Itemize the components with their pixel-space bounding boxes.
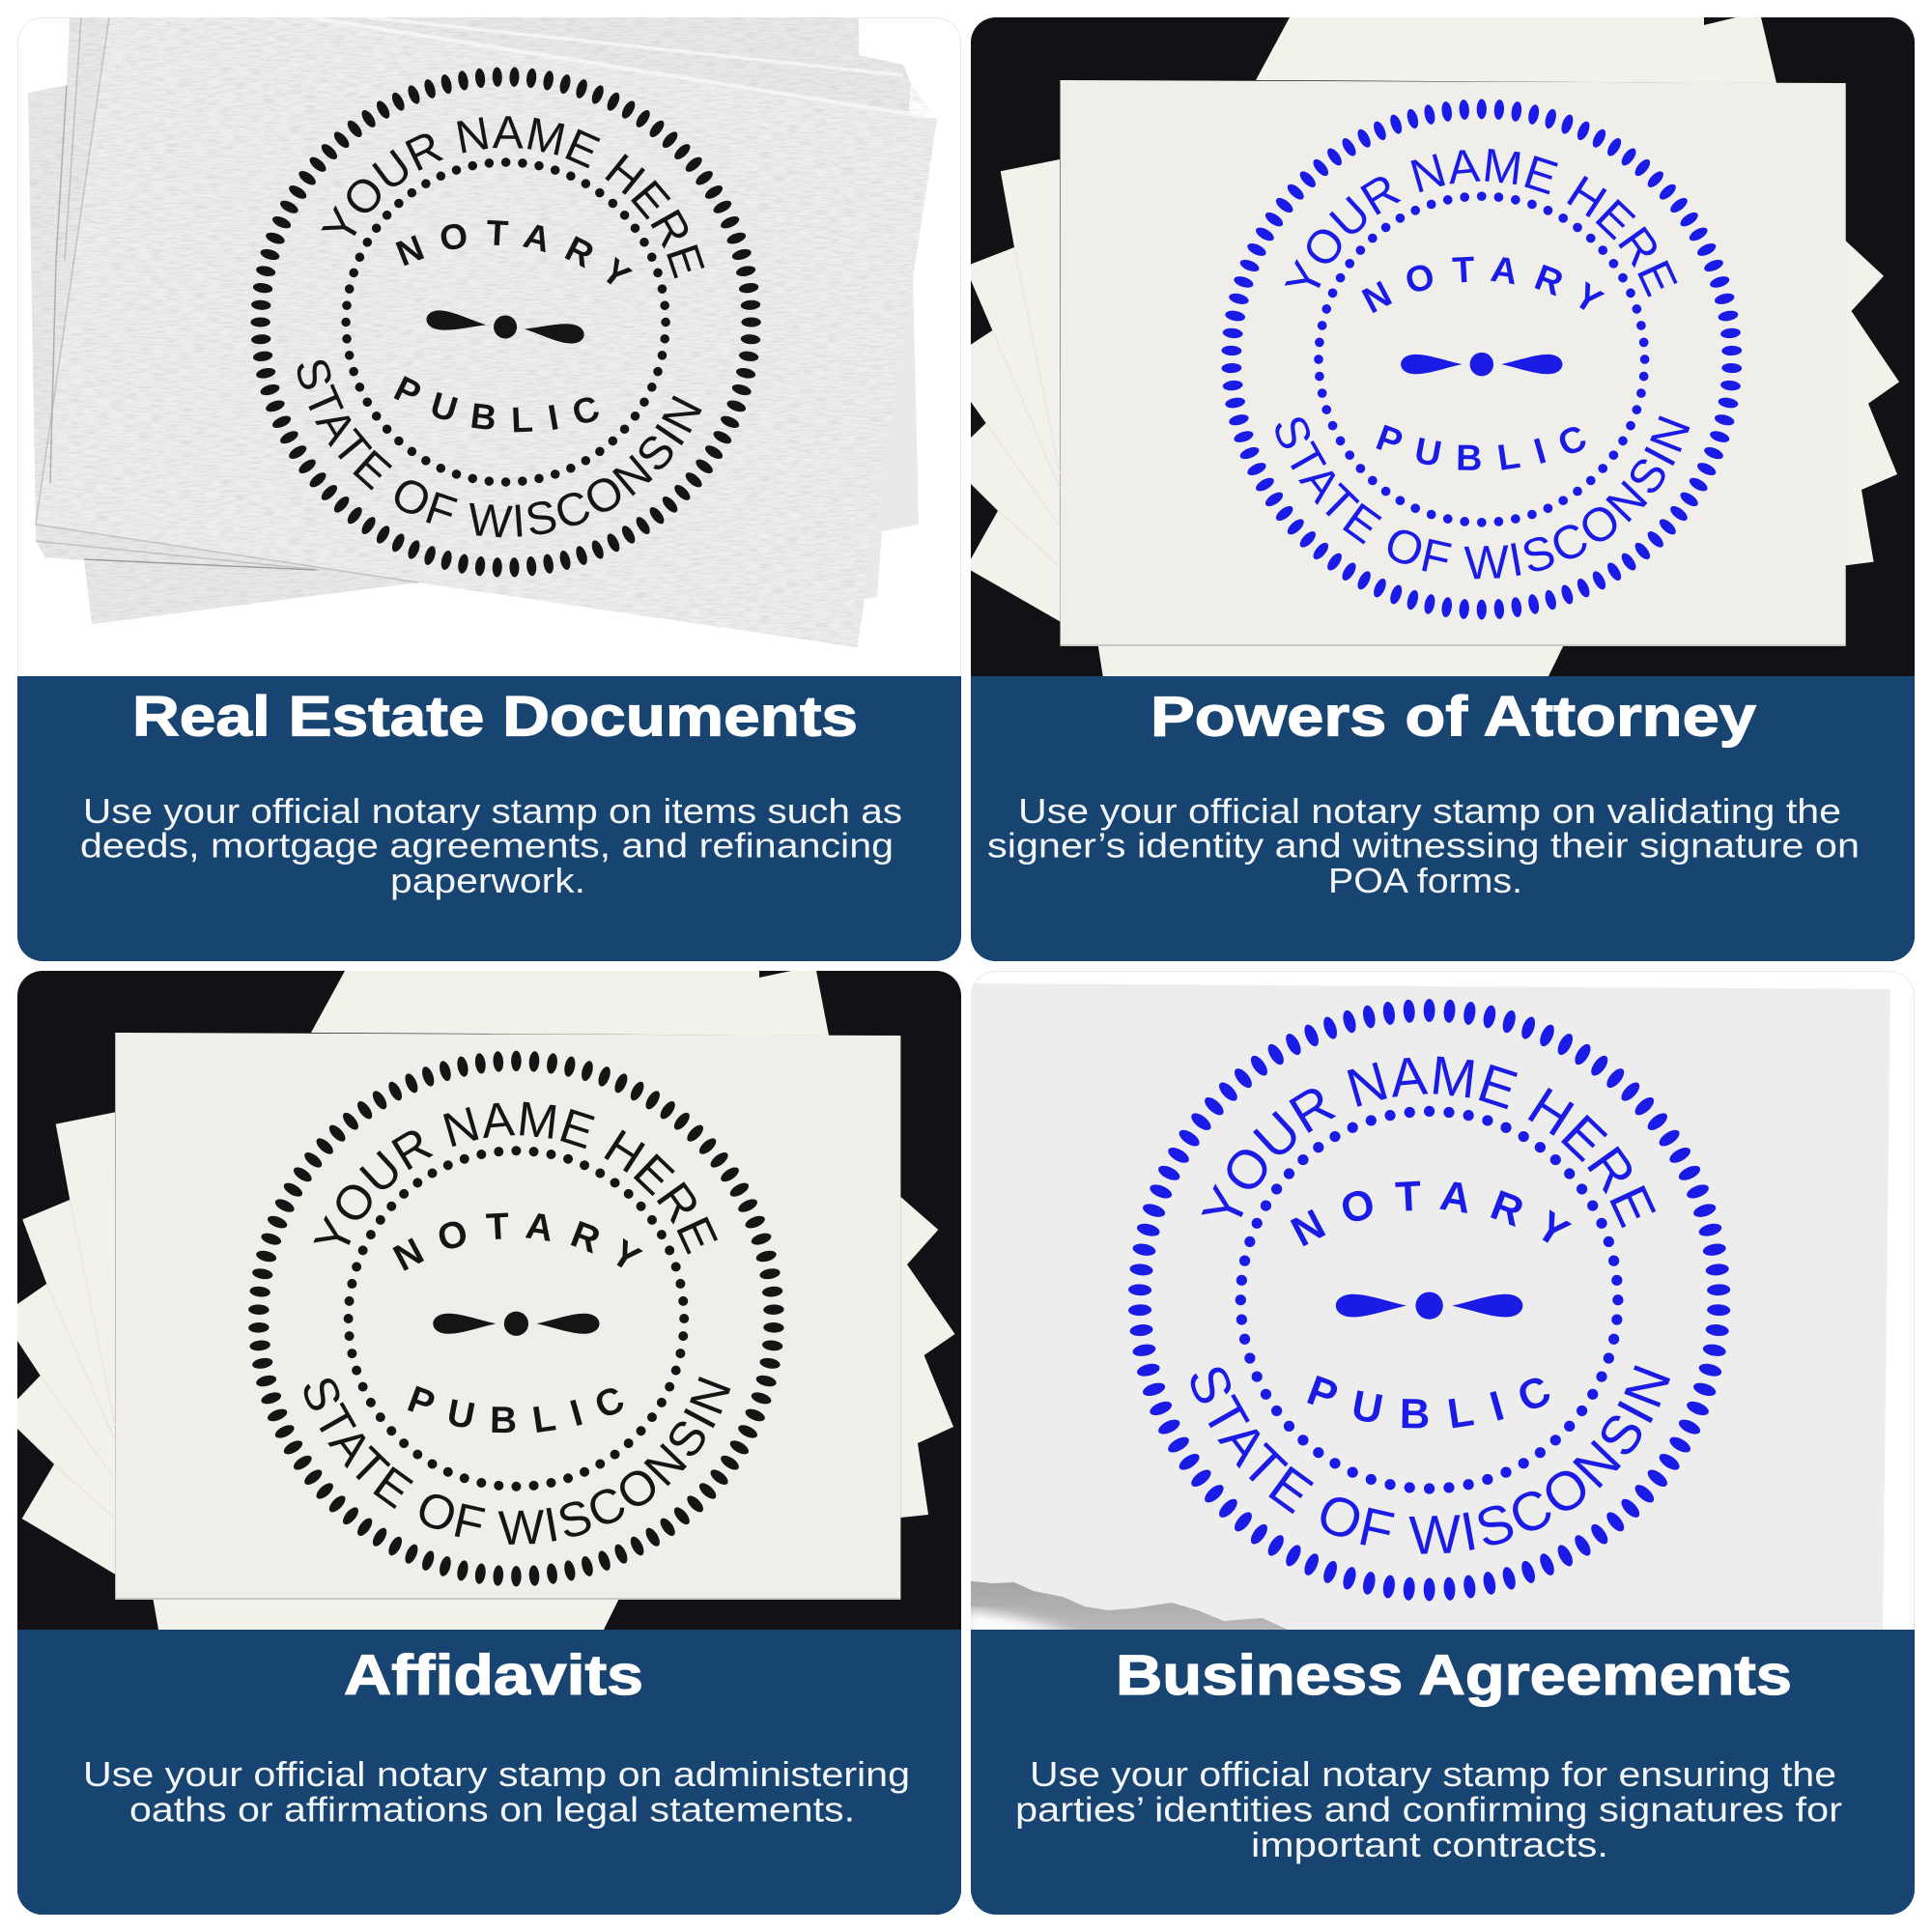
description: important contracts. [1251,1825,1608,1864]
stamp: blue seal: NOTARY [1362,257,1605,313]
description [80,791,902,900]
caption box [17,676,961,961]
photo: torn paper sheet [966,983,1890,1637]
stamp: blue seal: STATE OF WISCONSIN [1275,415,1690,580]
stamp: blue seal [1221,99,1743,620]
photo: fanned cream sheets and card [971,17,1899,676]
stamp: blue seal: STATE OF WISCONSIN [1190,1365,1670,1554]
description: Use your official notary stamp on administering [83,1754,910,1794]
panel: real estate documents [17,17,961,961]
heading: Business Agreements [1116,1644,1792,1707]
stamp: blue seal [1128,999,1731,1602]
panel: affidavits [17,971,961,1915]
description: signer’s identity and witnessing their signature on [987,825,1860,866]
stamp: blue seal: YOUR NAME HERE [1285,149,1678,298]
description [988,798,1857,893]
description: parties’ identities and confirming signatures for [1015,1789,1842,1830]
stamp: black seal: NOTARY [396,220,633,284]
stamp: black seal: STATE OF WISCONSIN [303,1377,730,1545]
description: paperwork. [390,861,585,900]
stamp: blue seal: PUBLIC [1376,425,1586,470]
description: oaths or affirmations on legal statements. [129,1789,855,1830]
photo: fanned cream sheets and card [17,971,954,1630]
description: Use your official notary stamp for ensuring the [1030,1754,1836,1794]
stamp: black seal: YOUR NAME HERE [313,1101,719,1255]
stamp: black seal: PUBLIC [408,1385,624,1434]
stamp: blue seal: NOTARY [1291,1180,1573,1246]
stamp: black seal: YOUR NAME HERE [321,116,705,278]
description: Use your official notary stamp on items such as [83,791,902,831]
description [86,1761,908,1829]
stamp: blue seal: PUBLIC [1307,1376,1549,1428]
stamp: black seal: STATE OF WISCONSIN [298,359,702,537]
heading: Affidavits [344,1644,643,1707]
stamp: black seal [248,1051,784,1586]
panel: business agreements [971,971,1915,1915]
stamp: black seal: PUBLIC [394,376,599,433]
stamp: black seal: NOTARY [392,1213,643,1271]
stamp: black seal [250,68,761,578]
description: POA forms. [1328,861,1522,900]
caption box [971,676,1915,961]
description: deeds, mortgage agreements, and refinancing [80,825,894,866]
caption box [17,1630,961,1915]
heading: Powers of Attorney [1151,686,1756,748]
description [1015,1754,1842,1864]
stamp: blue seal: YOUR NAME HERE [1202,1057,1656,1229]
heading: Real Estate Documents [132,686,858,748]
caption box [971,1630,1915,1915]
photo: textured paper stack [28,17,937,647]
description: Use your official notary stamp on validating the [1018,791,1841,831]
panel: powers of attorney [971,17,1915,961]
